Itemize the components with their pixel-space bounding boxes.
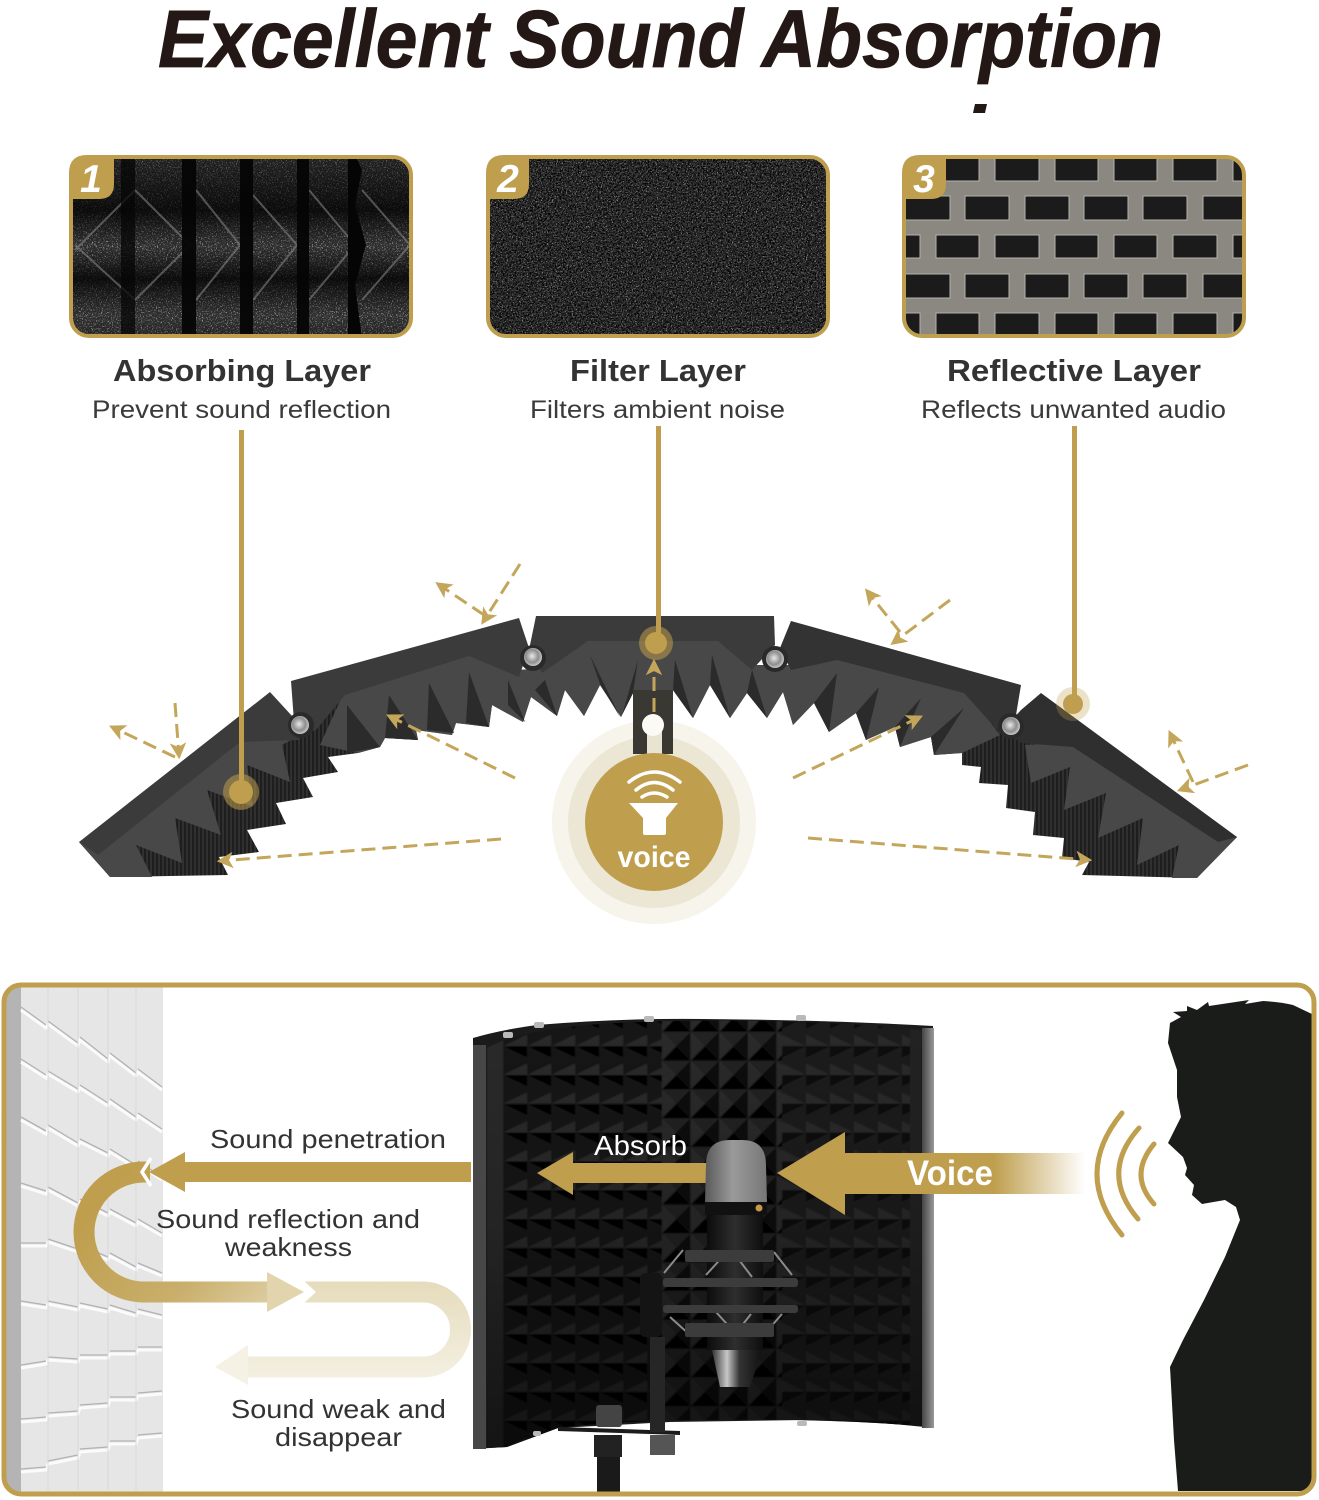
light foam, left wing — [79, 735, 300, 877]
rigid shell segments — [79, 616, 1237, 855]
description: Filters ambient noise — [530, 396, 785, 424]
foam base silhouette — [79, 636, 1237, 878]
voice label: voice — [618, 841, 690, 874]
icon: sound waves from mouth — [1097, 1113, 1154, 1235]
mic tail — [712, 1350, 762, 1387]
voice circle with icon — [585, 753, 723, 891]
small stray mark — [973, 104, 987, 113]
voice arrow — [777, 1132, 1085, 1215]
icon: speaker with sound waves — [629, 772, 680, 835]
number badge 3: 3 — [913, 158, 935, 201]
number badge 3 — [902, 155, 946, 201]
leader line: filter layer — [639, 426, 673, 660]
leader line: absorbing layer — [223, 430, 259, 810]
mic grille — [705, 1140, 767, 1202]
left edge strip — [473, 1045, 486, 1449]
light foam, centre panels — [320, 636, 1000, 755]
description: Prevent sound reflection — [92, 396, 391, 424]
panel: reflective layer — [900, 155, 1249, 424]
absorb arrow — [537, 1152, 707, 1195]
shock mount — [663, 1250, 798, 1337]
label: sound weak: Sound weak and — [231, 1394, 446, 1424]
label: sound weak: disappear — [275, 1422, 402, 1452]
right edge strip — [922, 1028, 934, 1428]
texture: pyramid foam close-up — [69, 155, 413, 338]
heading: absorbing layer: Absorbing Layer — [113, 353, 371, 388]
person silhouette — [1168, 1000, 1314, 1491]
penetration arrow — [149, 1152, 471, 1192]
light foam, right wing — [1025, 742, 1237, 878]
label: absorb: Absorb — [594, 1130, 687, 1161]
dark foam wedge sides — [347, 655, 964, 755]
hinge screws — [288, 645, 1024, 739]
dashed sound-path arrows — [112, 564, 1248, 861]
heading: filter layer: Filter Layer — [570, 353, 746, 388]
heading: reflective layer: Reflective Layer — [947, 353, 1201, 388]
reflection arrow: curving off the wall — [84, 1158, 304, 1312]
panel border — [4, 985, 1314, 1494]
label: voice: Voice — [907, 1154, 993, 1193]
pyramid foam — [487, 1020, 922, 1450]
description: Reflects unwanted audio — [921, 396, 1226, 424]
panel: filter layer — [486, 155, 830, 424]
texture: perforated metal — [900, 155, 1249, 339]
panel: absorbing layer — [69, 155, 413, 424]
top view of curved shield — [79, 616, 1237, 878]
stand pole and mount — [558, 1273, 680, 1492]
fading arrow: sound weakens — [215, 1279, 461, 1385]
label: sound reflection: weakness — [224, 1232, 352, 1262]
brick wall — [4, 985, 163, 1494]
microphone on shock mount — [558, 1140, 798, 1492]
texture: flat foam — [486, 155, 830, 338]
label: sound reflection: Sound reflection and — [156, 1204, 420, 1234]
number badge 2 — [486, 155, 529, 201]
stand mount — [633, 690, 673, 755]
label: sound penetration: Sound penetration — [210, 1124, 446, 1154]
isolation shield front view — [473, 1015, 934, 1450]
leader line: reflective layer — [1056, 426, 1090, 721]
top and bottom rivets — [503, 1015, 807, 1436]
number badge 2: 2 — [496, 158, 519, 201]
number badge 1 — [69, 155, 114, 201]
panel: usage scene frame — [6, 988, 471, 1492]
mic ring with gold dot — [705, 1202, 767, 1215]
voice source rings — [552, 720, 756, 924]
number badge 1: 1 — [80, 158, 102, 201]
shield outer body — [473, 1019, 934, 1449]
mic body — [707, 1215, 763, 1350]
